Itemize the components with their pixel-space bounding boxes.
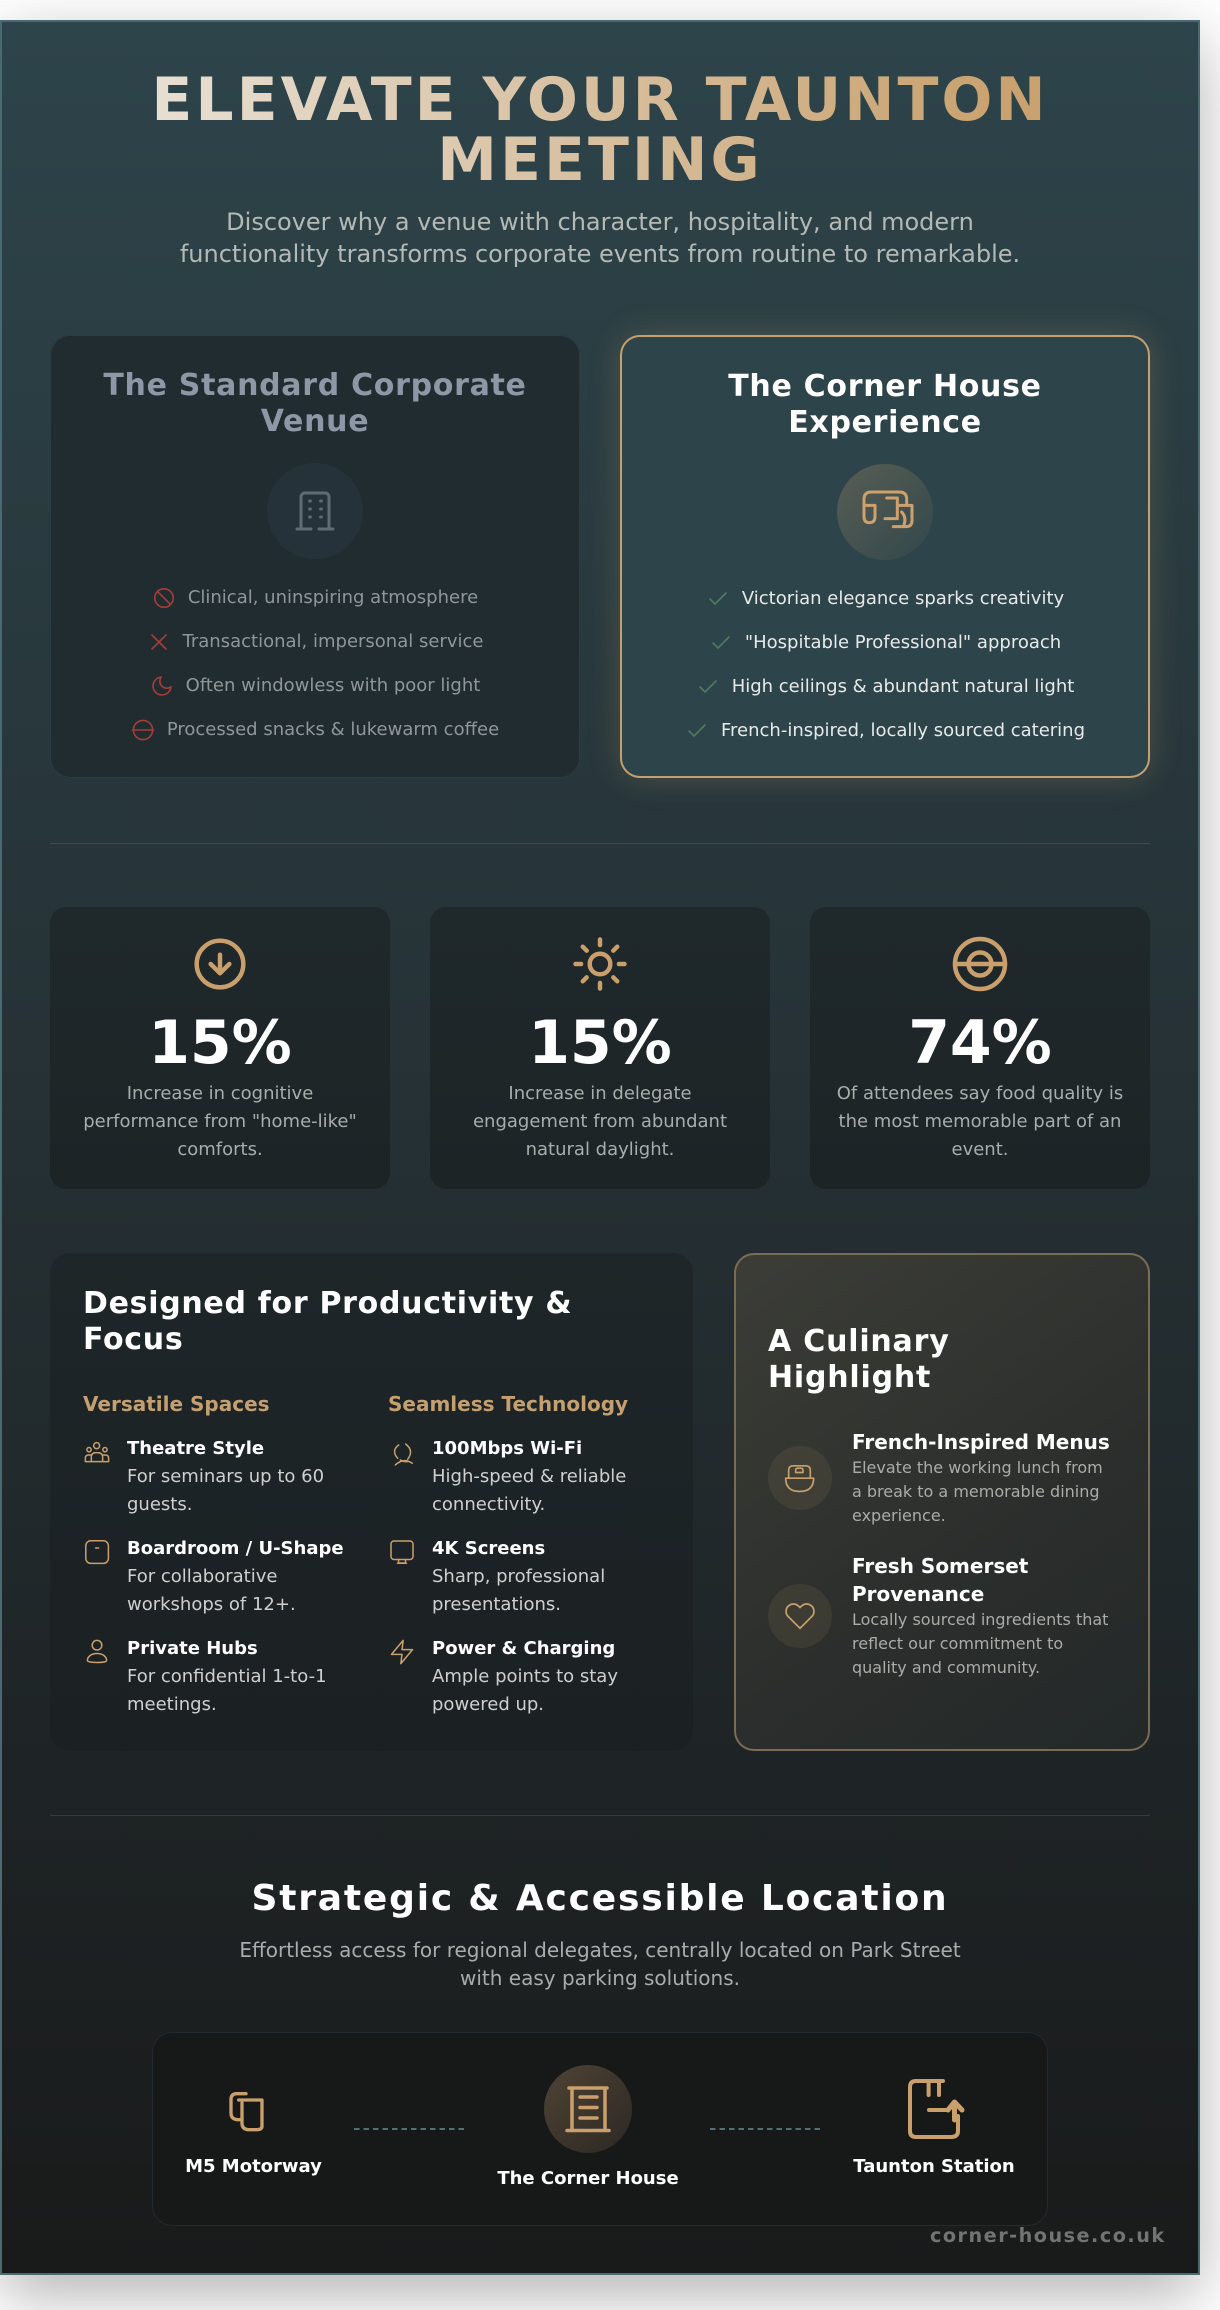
list item: transactional: Transactional, impersonal service: [183, 631, 483, 652]
stat value: 15%: 15%: [148, 1008, 292, 1078]
stat description: [837, 1083, 1123, 1160]
icon: screen: [390, 1540, 414, 1564]
stat description: engagement from abundant: [473, 1111, 727, 1132]
text: theatre style: Theatre Style: [127, 1438, 264, 1459]
stat description: the most memorable part of an: [839, 1111, 1121, 1132]
heading: corner house: The Corner House: [728, 369, 1042, 404]
title: ELEVATE YOUR TAUNTON: [151, 65, 1049, 135]
text: power: [432, 1638, 618, 1715]
footer url: corner-house.co.uk: [930, 2224, 1166, 2247]
text: theatre style: For seminars up to 60: [127, 1466, 324, 1487]
heading: standard venue: The Standard Corporate: [103, 368, 527, 403]
panel: culinary highlight: [734, 1253, 1150, 1751]
icon: person: [86, 1640, 108, 1664]
title: [50, 70, 1150, 190]
text: fresh somerset provenance: Provenance: [852, 1582, 984, 1606]
icon: theatre people: [84, 1442, 110, 1462]
text: boardroom: For collaborative: [127, 1566, 277, 1587]
label: taunton station: Taunton Station: [853, 2156, 1015, 2177]
icon: corner house devices: [837, 464, 933, 560]
list item: high ceilings: High ceilings & abundant natural light: [732, 676, 1074, 697]
description: provenance: [852, 1610, 1108, 1677]
text: power: Power & Charging: [432, 1638, 615, 1659]
stat card: delegate engagement: [430, 907, 770, 1189]
list item: clinical: Clinical, uninspiring atmosphere: [188, 587, 478, 608]
subheading: versatile spaces: Versatile Spaces: [83, 1392, 270, 1416]
heading: culinary: Highlight: [768, 1360, 931, 1395]
heading: productivity: [83, 1286, 572, 1357]
heading: corner house: [728, 369, 1042, 440]
stat description: natural daylight.: [526, 1139, 674, 1160]
text: theatre style: [127, 1438, 324, 1515]
text: private hubs: [127, 1638, 327, 1715]
text: private hubs: meetings.: [127, 1694, 217, 1715]
text: power: Ample points to stay: [432, 1666, 618, 1687]
icon: wi-fi: [394, 1443, 414, 1466]
text: french-inspired menus: French-Inspired Menus: [852, 1430, 1110, 1454]
title: MEETING: [437, 125, 763, 195]
description: provenance: Locally sourced ingredients that: [852, 1610, 1108, 1629]
icon glyph: bowl: [784, 1465, 814, 1492]
panel: standard corporate venue: [50, 335, 580, 778]
description: provenance: reflect our commitment to: [852, 1634, 1063, 1653]
description: french menus: experience.: [852, 1506, 946, 1525]
heading: culinary: A Culinary: [768, 1324, 950, 1359]
heading: corner house: Experience: [788, 405, 982, 440]
text: private hubs: Private Hubs: [127, 1638, 258, 1659]
icon: plate: [952, 936, 1008, 992]
text: location subtitle: Effortless access for regional delegates, centrally located on Park Street: [239, 1938, 961, 1962]
stat card: cognitive performance: [50, 907, 390, 1189]
panel: productivity and focus: [50, 1253, 693, 1751]
list item: french catering: French-inspired, locally sourced catering: [721, 720, 1085, 741]
text: fresh somerset provenance: [852, 1554, 1028, 1606]
stat card: food quality: [810, 907, 1150, 1189]
heading: productivity: Focus: [83, 1322, 183, 1357]
subtitle: functionality transforms corporate events from routine to remarkable.: [180, 240, 1020, 268]
icon: taunton station: [900, 2072, 970, 2144]
label: m5 motorway: M5 Motorway: [185, 2156, 322, 2177]
stat description: [473, 1083, 727, 1160]
stat description: comforts.: [177, 1139, 263, 1160]
text: 4k screens: presentations.: [432, 1594, 561, 1615]
text: location subtitle: with easy parking solutions.: [460, 1966, 740, 1990]
heading: culinary: [768, 1324, 950, 1395]
icon: french menu bowl: [768, 1446, 832, 1510]
icon: boardroom: [85, 1540, 110, 1564]
description: french menus: a break to a memorable dining: [852, 1482, 1100, 1501]
text: 4k screens: 4K Screens: [432, 1538, 545, 1559]
text: location subtitle: [239, 1938, 961, 1990]
stat description: Increase in cognitive: [127, 1083, 313, 1104]
text: wi-fi: High-speed & reliable: [432, 1466, 626, 1487]
heading: productivity: Designed for Productivity &: [83, 1286, 572, 1321]
text: wi-fi: 100Mbps Wi-Fi: [432, 1438, 582, 1459]
icon: arrow down circle: [194, 938, 246, 990]
connector: dashed right: [710, 2128, 820, 2130]
stat description: Of attendees say food quality is: [837, 1083, 1123, 1104]
list item: windowless: Often windowless with poor light: [186, 675, 480, 696]
description: french menus: [852, 1458, 1103, 1525]
text: wi-fi: [432, 1438, 626, 1515]
list item: hospitable: "Hospitable Professional" approach: [745, 632, 1061, 653]
list item: processed snacks: Processed snacks & lukewarm coffee: [167, 719, 499, 740]
icon: heart background: [768, 1584, 832, 1648]
text: theatre style: guests.: [127, 1494, 192, 1515]
stat description: event.: [952, 1139, 1008, 1160]
stat value: 74%: 74%: [908, 1008, 1052, 1078]
stat description: [83, 1083, 357, 1160]
text: 4k screens: Sharp, professional: [432, 1566, 605, 1587]
heading: standard venue: Venue: [261, 404, 369, 439]
label: the corner house: The Corner House: [497, 2168, 679, 2189]
text: boardroom: Boardroom / U-Shape: [127, 1538, 344, 1559]
subheading: seamless technology: Seamless Technology: [388, 1392, 628, 1416]
icon: office building: [267, 463, 363, 559]
icon glyph: heart: [785, 1603, 815, 1630]
panel: corner house experience: [620, 335, 1150, 778]
list item: victorian: Victorian elegance sparks creativity: [742, 588, 1064, 609]
icon: lightning bolt: [390, 1640, 414, 1664]
panel: location map: [152, 2032, 1048, 2226]
text: boardroom: [127, 1538, 344, 1615]
connector: dashed left: [354, 2128, 464, 2130]
text: 4k screens: [432, 1538, 605, 1615]
subtitle: [180, 208, 1020, 268]
text: wi-fi: connectivity.: [432, 1494, 545, 1515]
icon: m5 motorway: [229, 2092, 264, 2132]
text: power: powered up.: [432, 1694, 544, 1715]
text: private hubs: For confidential 1-to-1: [127, 1666, 327, 1687]
text: boardroom: workshops of 12+.: [127, 1594, 296, 1615]
description: french menus: Elevate the working lunch from: [852, 1458, 1103, 1477]
icon: the corner house: [544, 2065, 632, 2153]
heading: strategic location: Strategic & Accessible Location: [252, 1878, 948, 1919]
stat description: Increase in delegate: [508, 1083, 692, 1104]
description: provenance: quality and community.: [852, 1658, 1040, 1677]
heading: standard venue: [103, 368, 527, 439]
text: fresh somerset provenance: Fresh Somerset: [852, 1554, 1028, 1578]
subtitle: Discover why a venue with character, hospitality, and modern: [226, 208, 974, 236]
stat value: 15%: 15%: [528, 1008, 672, 1078]
icon: sun: [573, 937, 627, 991]
stat description: performance from "home-like": [83, 1111, 357, 1132]
